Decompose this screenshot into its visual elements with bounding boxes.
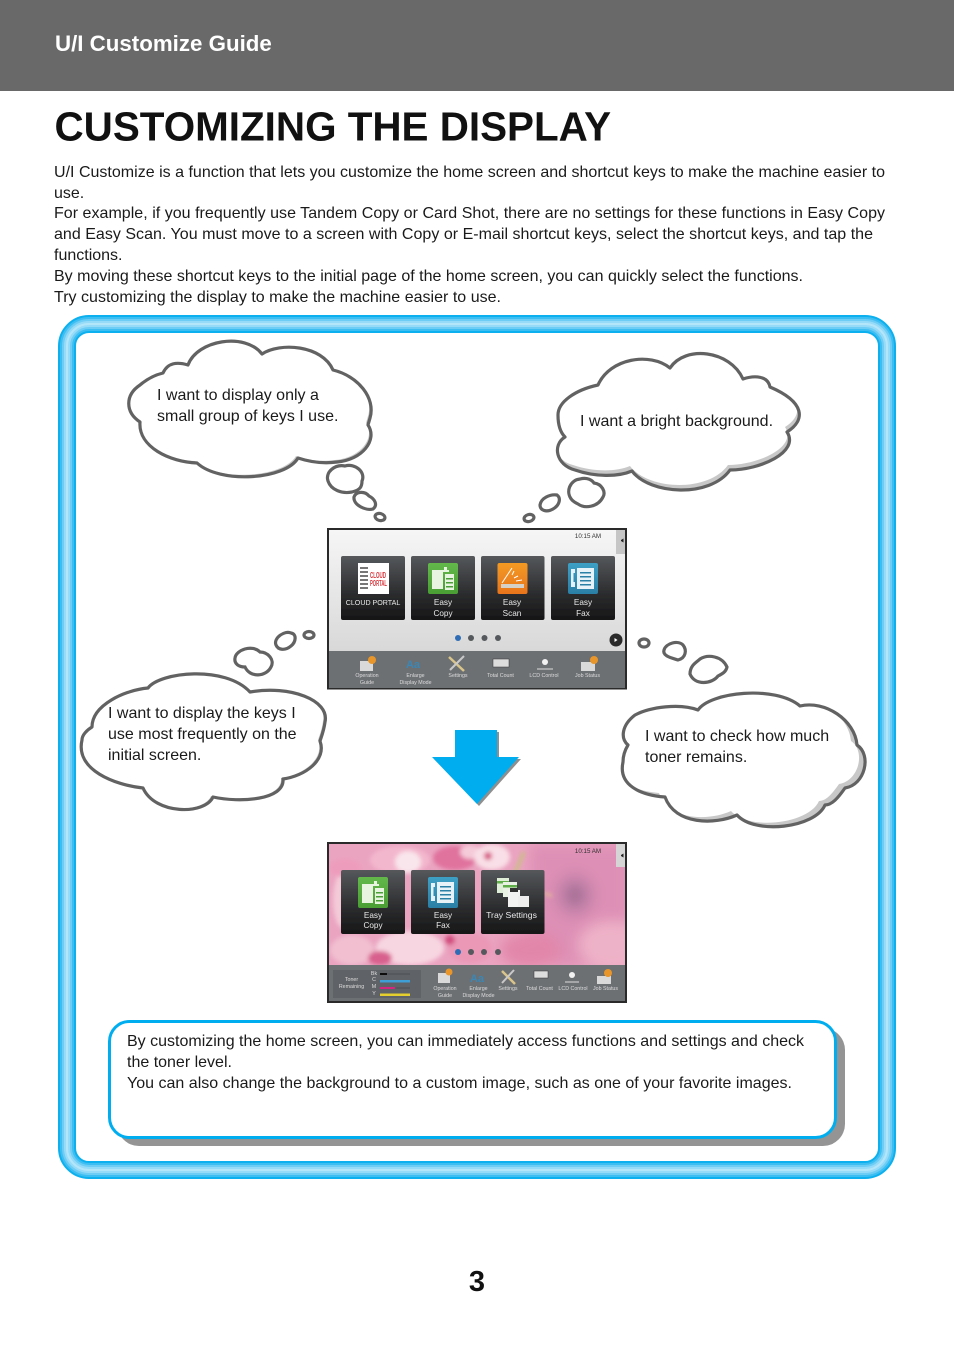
bottom shortcut bar: [329, 651, 625, 688]
callout: summary box: [110, 1022, 845, 1146]
thought bubble: bright background: I want a bright background.: [580, 413, 773, 430]
bottom shortcut bar: Display Mode: [399, 680, 432, 686]
screen: customized home screen: [328, 843, 646, 1002]
thought bubble: small group of keys: I want to display only a: [157, 387, 319, 404]
intro text: [54, 164, 885, 306]
callout: summary box: You can also change the background to a custom image, such as one of your favorite images.: [127, 1075, 792, 1092]
thought bubble: frequent keys: [79, 632, 325, 810]
toner remaining gauge: Y: [372, 991, 376, 997]
tile: cloud portal: CLOUD PORTAL: [346, 599, 400, 607]
toner remaining gauge: [333, 970, 421, 998]
intro text: functions.: [54, 247, 122, 264]
bottom bar with toner gauge: Total Count: [526, 986, 553, 992]
header bar: [0, 0, 954, 91]
callout: summary box: the toner level.: [127, 1054, 232, 1071]
bottom shortcut bar: Guide: [360, 680, 374, 686]
tile: easy copy: [341, 870, 405, 934]
thought bubble: toner remains: toner remains.: [645, 749, 747, 766]
tile: easy copy: Copy: [433, 609, 453, 618]
arrow: down: [432, 730, 521, 806]
thought bubble: toner remains: [616, 639, 865, 827]
intro text: U/I Customize is a function that lets you customize the home screen and shortcut keys to make the machine easier to: [54, 164, 885, 181]
page number: 3: [469, 1266, 485, 1298]
bottom shortcut bar: Operation: [355, 673, 379, 679]
tile: tray settings: Tray Settings: [486, 910, 538, 920]
tile: easy copy: [411, 556, 475, 620]
thought bubble: small group of keys: small group of keys I use.: [157, 408, 338, 425]
intro text: and Easy Scan. You must move to a screen with Copy or E-mail shortcut keys, select the shortcut keys, and tap the: [54, 226, 873, 243]
toner remaining gauge: Toner: [345, 977, 358, 983]
tile: easy scan: [481, 556, 544, 620]
bottom bar with toner gauge: LCD Control: [558, 986, 588, 992]
page indicator dots: [455, 949, 501, 955]
thought bubble: frequent keys: I want to display the keys I: [108, 705, 296, 722]
screen: default home screen: [328, 529, 626, 688]
toner remaining gauge: Remaining: [339, 984, 364, 990]
bottom bar with toner gauge: Enlarge: [469, 986, 488, 992]
toner remaining gauge: M: [372, 984, 376, 990]
tile: easy fax: [411, 870, 475, 934]
bottom bar with toner gauge: [329, 965, 625, 1001]
tile: easy scan: Easy: [503, 598, 522, 607]
bottom shortcut bar: Total Count: [487, 673, 514, 679]
intro text: Try customizing the display to make the machine easier to use.: [54, 289, 501, 306]
tile: easy copy: Easy: [434, 598, 453, 607]
thought bubble: toner remains: I want to check how much: [645, 728, 829, 745]
tile: easy fax: Easy: [434, 911, 453, 920]
tile: easy copy: Easy: [364, 911, 383, 920]
tile: easy fax: Fax: [436, 921, 450, 930]
bottom bar with toner gauge: Guide: [438, 993, 452, 999]
bottom shortcut bar: LCD Control: [529, 673, 559, 679]
intro text: For example, if you frequently use Tandem Copy or Card Shot, there are no settings for these functions in Easy Copy: [54, 205, 885, 222]
screen: customized home screen: 10:15 AM: [575, 848, 601, 855]
tile: cloud portal: PORTAL: [370, 579, 387, 588]
tile: easy scan: Scan: [503, 609, 522, 618]
bottom bar with toner gauge: Operation: [433, 986, 457, 992]
thought bubble: frequent keys: use most frequently on the: [108, 726, 297, 743]
page title: CUSTOMIZING THE DISPLAY: [54, 104, 611, 150]
bottom shortcut bar: Enlarge: [406, 673, 425, 679]
intro text: By moving these shortcut keys to the initial page of the home screen, you can quickly select the functions.: [54, 268, 803, 285]
screen: default home screen: 10:15 AM: [575, 533, 601, 540]
panel: blue frame: [67, 324, 887, 1170]
thought bubble: small group of keys: [127, 339, 386, 522]
intro text: use.: [54, 185, 84, 202]
tile: easy fax: Fax: [576, 609, 590, 618]
bottom bar with toner gauge: Aa: [470, 973, 485, 985]
callout: summary box: By customizing the home screen, you can immediately access functions and settings and check: [127, 1033, 805, 1050]
bottom shortcut bar: Job Status: [575, 673, 600, 679]
page indicator dots: [455, 635, 501, 641]
bottom bar with toner gauge: Display Mode: [462, 993, 495, 999]
bottom shortcut bar: Aa: [406, 659, 421, 671]
tile: tray settings: [481, 870, 544, 934]
header title: U/I Customize Guide: [55, 31, 272, 56]
tile: easy copy: Copy: [363, 921, 383, 930]
bottom bar with toner gauge: Settings: [498, 986, 518, 992]
next page button: [610, 634, 622, 646]
bottom shortcut bar: Settings: [448, 673, 468, 679]
toner remaining gauge: Bk: [371, 971, 377, 977]
tile: easy fax: Easy: [574, 598, 593, 607]
tile: cloud portal: [341, 556, 405, 620]
background photo: cherry blossoms: [329, 844, 646, 969]
thought bubble: bright background: [523, 349, 799, 523]
tile: easy fax: [551, 556, 615, 620]
thought bubble: frequent keys: initial screen.: [108, 747, 201, 764]
tile: cloud portal: CLOUD: [370, 571, 386, 580]
toner remaining gauge: C: [372, 977, 376, 983]
bottom bar with toner gauge: Job Status: [593, 986, 618, 992]
